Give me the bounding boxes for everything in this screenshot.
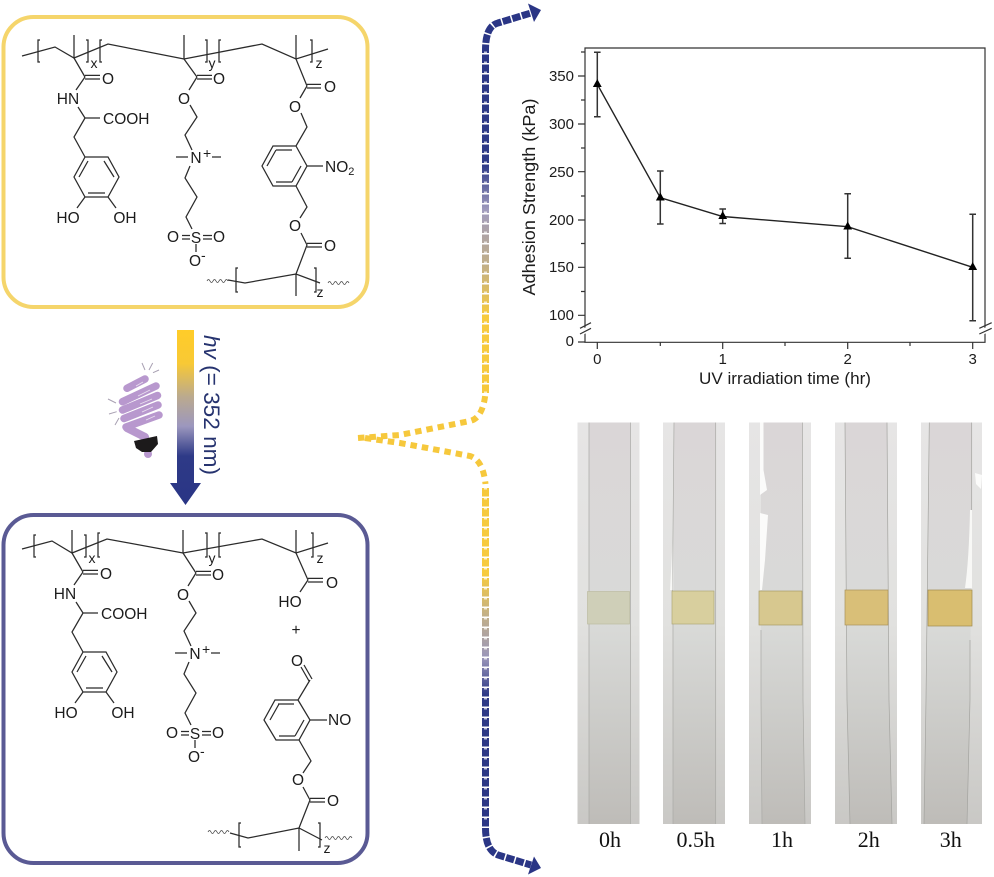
dopamine-like residue after: COOH — [101, 606, 148, 623]
y axis title: Adhesion Strength (kPa) — [519, 98, 539, 296]
label: hv wavelength: hv (= 352 nm) — [199, 335, 224, 475]
carboxylic acid residue — [278, 553, 338, 611]
strip labels: 3h — [940, 827, 962, 852]
arrow: UV irradiation — [170, 330, 224, 505]
polymer backbone after cleavage: x — [88, 550, 96, 566]
subscripts x y z: z — [316, 55, 322, 71]
axis break — [578, 323, 993, 337]
sulfobetaine residue: - — [201, 247, 206, 263]
strip labels — [599, 827, 962, 852]
carboxylic acid residue: HO — [278, 594, 302, 611]
polymer backbone after cleavage: y — [208, 550, 216, 566]
nitrosobenzaldehyde fragment: z — [324, 840, 330, 856]
sulfobetaine residue: O — [167, 229, 179, 246]
sulfobetaine residue after: O — [212, 567, 224, 584]
dopamine-like residue: HN — [57, 91, 79, 108]
photographs: lap-shear strips — [578, 422, 982, 852]
sulfobetaine residue after: N — [189, 646, 201, 663]
sulfobetaine residue — [167, 59, 225, 270]
strip 1h — [749, 422, 811, 824]
dopamine-like residue — [56, 58, 150, 227]
icon: UV light bulb — [108, 363, 159, 458]
strip labels: 2h — [858, 827, 880, 852]
sulfobetaine residue: S — [191, 230, 201, 247]
sulfobetaine residue: O — [213, 71, 225, 88]
polymer backbone — [22, 35, 328, 62]
sulfobetaine residue: O — [189, 253, 201, 270]
nitrobenzyl crosslinker residue: NO — [325, 159, 348, 176]
y axis labels: 200 — [549, 212, 574, 229]
dopamine-like residue after: O — [100, 566, 112, 583]
strip 2h — [835, 422, 897, 824]
nitrobenzyl crosslinker residue: O — [324, 79, 336, 96]
nitrobenzyl crosslinker residue: O — [289, 218, 301, 235]
y axis labels: 250 — [549, 164, 574, 181]
strip labels: 0.5h — [677, 827, 715, 852]
y axis labels: 150 — [549, 259, 574, 276]
subscripts x y z: x — [90, 55, 98, 71]
dopamine-like residue: HO — [56, 210, 80, 227]
y axis labels: 0 — [566, 333, 574, 350]
dopamine-like residue: COOH — [103, 111, 150, 128]
x axis labels: 3 — [969, 351, 977, 368]
strip 0.5h — [663, 422, 725, 824]
sulfobetaine residue after: S — [190, 726, 200, 743]
sulfobetaine residue after — [166, 553, 224, 766]
dopamine-like residue after: HN — [54, 586, 76, 603]
chart: adhesion strength vs UV irradiation time — [519, 48, 993, 388]
sulfobetaine residue: + — [203, 145, 211, 161]
y axis labels — [549, 68, 574, 350]
nitrosobenzaldehyde fragment: O — [292, 772, 304, 789]
dopamine-like residue after: OH — [111, 705, 135, 722]
strip 3h — [921, 422, 982, 824]
plus sign: + — [291, 622, 301, 639]
data markers — [593, 79, 977, 270]
nitrobenzyl crosslinker residue: z — [316, 284, 324, 300]
arrow: branch up to adhesion chart — [358, 4, 541, 438]
x axis labels — [593, 351, 977, 368]
y axis labels: 350 — [549, 68, 574, 85]
data line — [597, 84, 973, 267]
sulfobetaine residue after: - — [200, 743, 205, 759]
strip labels: 1h — [771, 827, 793, 852]
sulfobetaine residue after: O — [166, 725, 178, 742]
dopamine-like residue after: HO — [54, 705, 78, 722]
error bars — [594, 52, 976, 321]
x axis labels: 0 — [593, 351, 601, 368]
dopamine-like residue after — [54, 553, 148, 722]
chart frame and ticks — [578, 48, 985, 349]
strip 0h — [578, 422, 640, 824]
nitrobenzyl crosslinker residue: 2 — [348, 166, 354, 178]
sulfobetaine residue after: O — [188, 749, 200, 766]
y axis labels: 100 — [549, 307, 574, 324]
sulfobetaine residue after: O — [212, 725, 224, 742]
nitrobenzyl crosslinker residue: O — [324, 238, 336, 255]
sulfobetaine residue: O — [213, 229, 225, 246]
nitrobenzyl crosslinker residue: O — [289, 99, 301, 116]
strip labels: 0h — [599, 827, 621, 852]
sulfobetaine residue after: + — [202, 641, 210, 657]
nitrobenzyl crosslinker residue — [207, 59, 354, 300]
x axis labels: 2 — [844, 351, 852, 368]
subscripts x y z: y — [208, 55, 216, 71]
x axis title: UV irradiation time (hr) — [699, 370, 871, 388]
nitrosobenzaldehyde fragment — [208, 653, 352, 856]
panel: polymer after irradiation — [4, 515, 368, 863]
x axis labels: 1 — [719, 351, 727, 368]
y axis labels: 300 — [549, 116, 574, 133]
nitrosobenzaldehyde fragment: O — [327, 793, 339, 810]
polymer backbone after cleavage: z — [316, 550, 324, 566]
polymer backbone after cleavage — [22, 530, 328, 566]
nitrosobenzaldehyde fragment: NO — [328, 712, 351, 729]
dopamine-like residue: OH — [113, 210, 137, 227]
panel: polymer before irradiation — [4, 17, 368, 307]
arrow: branch down to photographs — [365, 438, 541, 874]
subscripts x y z — [90, 55, 322, 71]
sulfobetaine residue: N — [190, 150, 202, 167]
carboxylic acid residue: O — [326, 575, 338, 592]
dopamine-like residue: O — [102, 71, 114, 88]
nitrosobenzaldehyde fragment: O — [291, 653, 303, 670]
sulfobetaine residue after: O — [177, 587, 189, 604]
sulfobetaine residue: O — [178, 91, 190, 108]
